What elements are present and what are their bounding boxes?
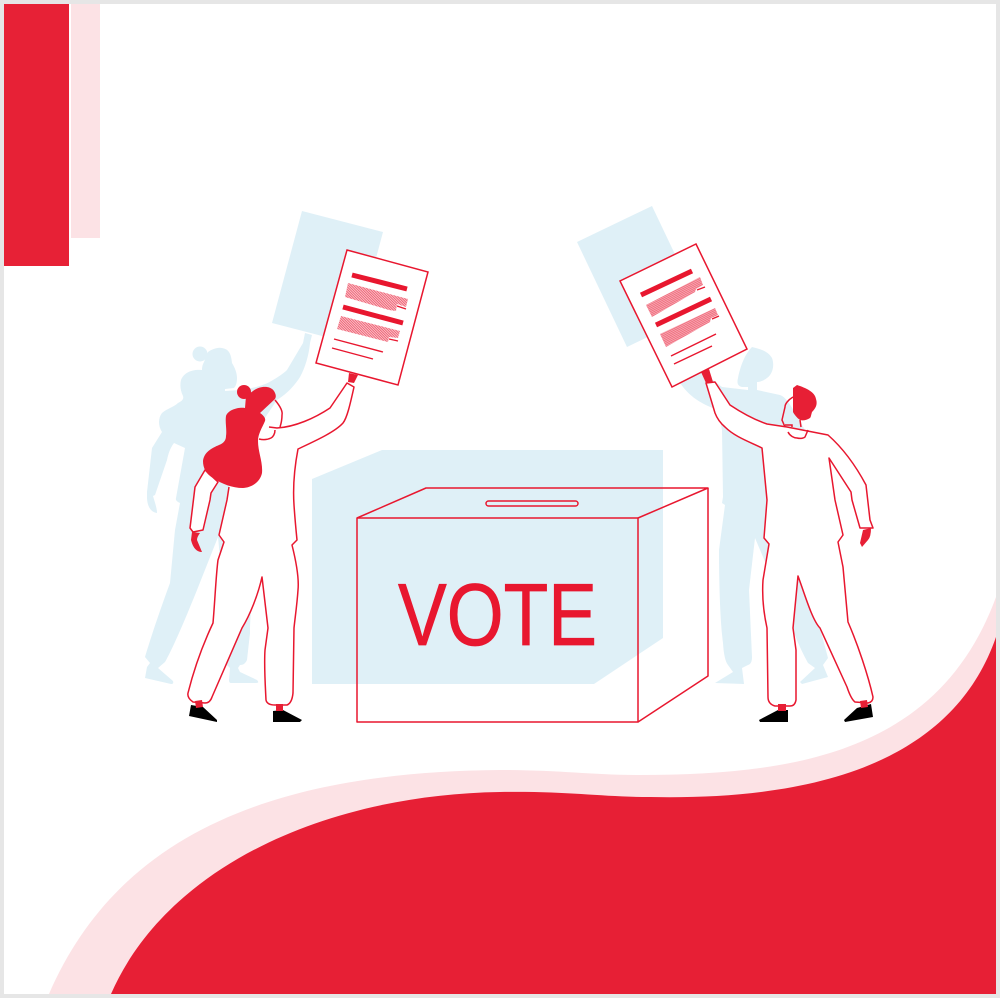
man: hand and grip	[701, 369, 713, 383]
woman: face and neck	[259, 400, 282, 440]
paper held by man	[620, 244, 747, 387]
man: face and collar	[782, 397, 808, 438]
red bottom wave	[111, 637, 996, 994]
woman: shoes	[189, 705, 302, 722]
ballot box outline	[357, 488, 708, 722]
pale pink bottom wave	[49, 597, 996, 994]
shadow: ballot box	[312, 450, 663, 684]
top-left pale pink bar	[71, 4, 100, 238]
ballot box slot	[486, 501, 578, 506]
man figure	[701, 369, 873, 722]
woman paper: hatched text blocks	[337, 283, 408, 342]
woman: hair	[203, 387, 276, 488]
woman: hand and grip	[348, 373, 358, 383]
paper held by woman	[316, 250, 428, 385]
woman: lowered hand	[191, 532, 202, 552]
shadow: woman holding paper	[145, 211, 383, 684]
man: lowered hand	[860, 528, 871, 547]
woman paper: heading bars	[343, 275, 407, 323]
woman: ankles	[195, 700, 283, 711]
top-left red bar	[4, 4, 69, 266]
man: ankles	[778, 700, 868, 711]
man: shoes	[759, 704, 873, 722]
man: body and raised arm	[706, 382, 873, 706]
VOTE label on ballot box: VOTE	[398, 565, 597, 664]
woman figure	[188, 373, 358, 722]
woman: body and raised arm	[188, 383, 354, 705]
woman: left arm	[190, 470, 218, 532]
man paper: hatched text blocks	[646, 277, 718, 347]
shadow: man holding paper	[577, 206, 828, 684]
woman paper: text lines	[332, 306, 406, 359]
man: hair	[793, 385, 817, 420]
man paper: text lines	[671, 287, 719, 364]
man paper: heading bars	[641, 271, 711, 325]
